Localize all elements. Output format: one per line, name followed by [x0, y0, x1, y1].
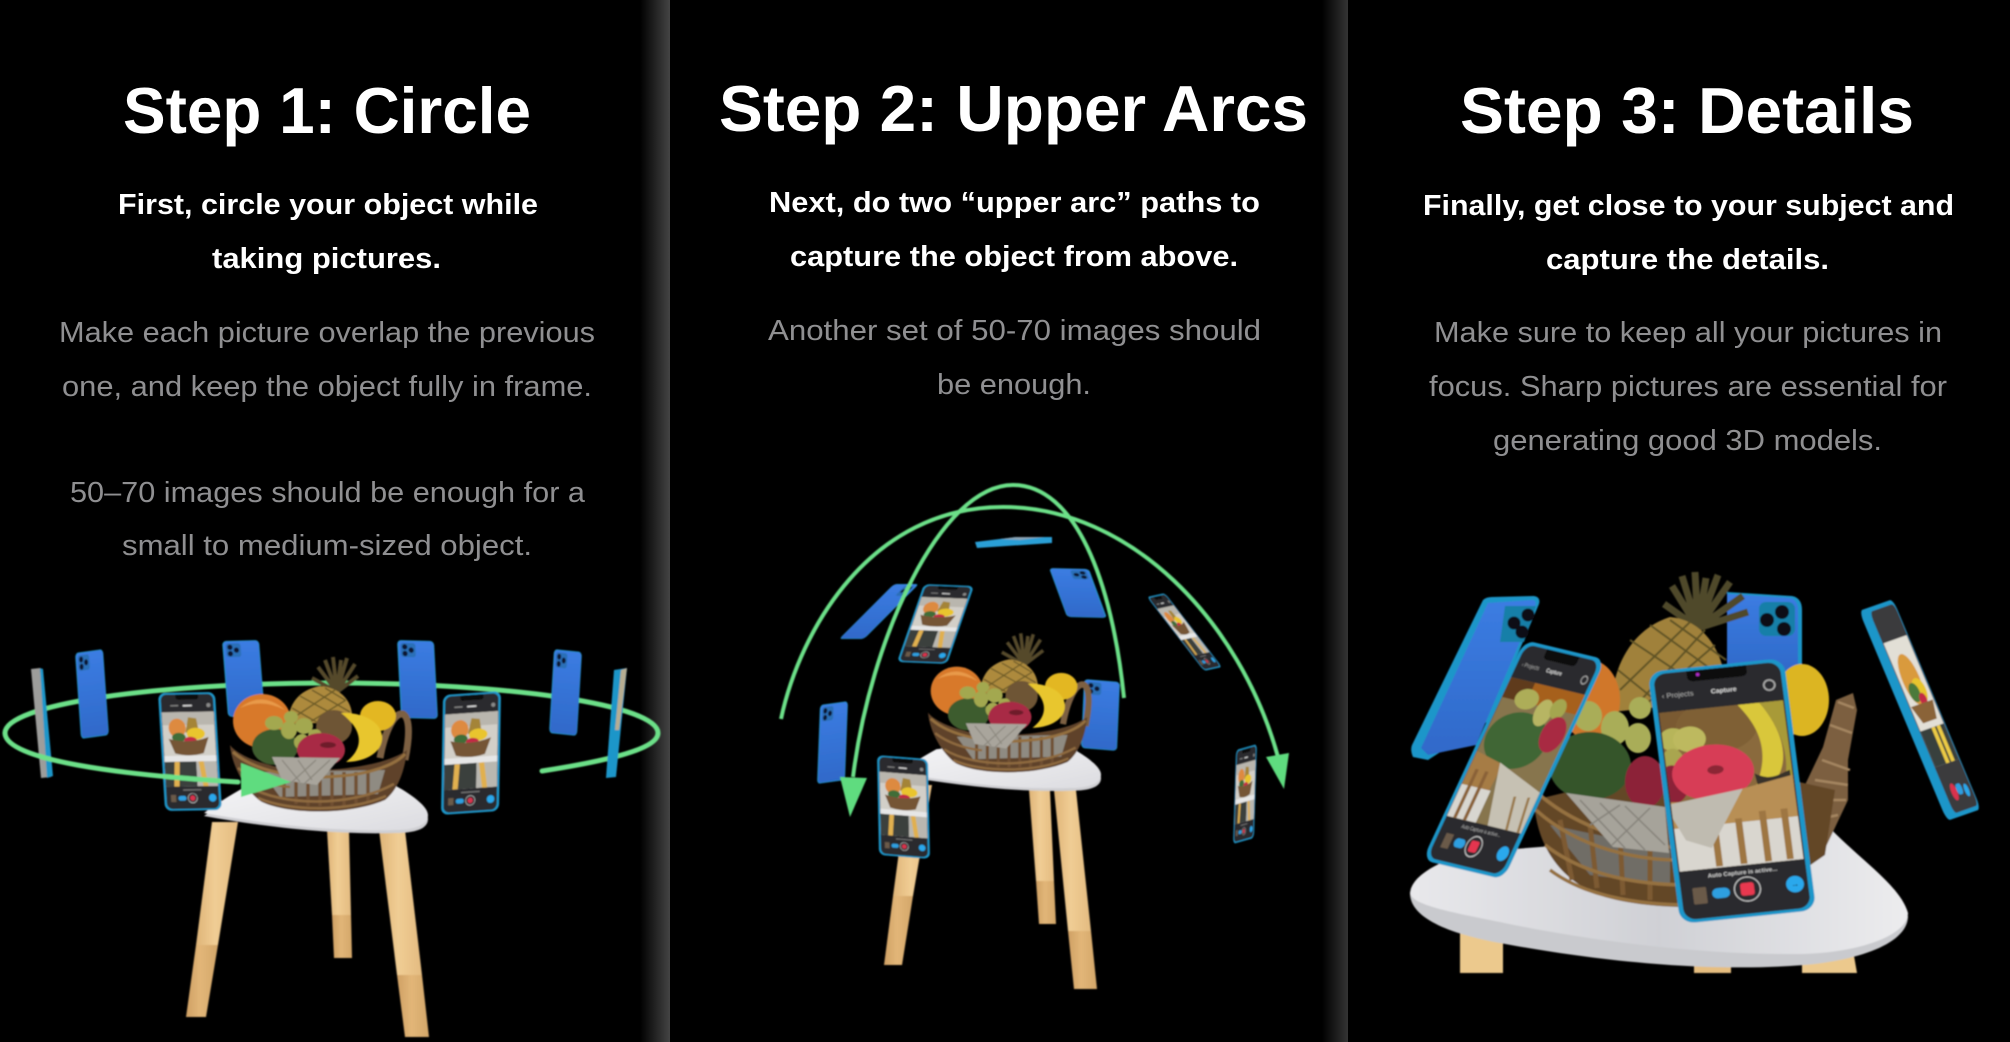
ring front with arrow — [5, 733, 291, 797]
divider: panel 2 to 3 — [1322, 0, 1348, 1042]
arc two with arrow — [840, 485, 1124, 817]
body text: step 3 — [1429, 317, 1947, 457]
lead text: step 2 — [769, 187, 1260, 273]
heading: step 1: Step 1: Circle — [123, 74, 531, 147]
close-up phone left — [1422, 640, 1606, 880]
body text: step 2 — [768, 315, 1261, 401]
lead text: step 1: First, circle your object while — [118, 189, 538, 221]
illustration: circular capture path around fruit basket — [5, 640, 658, 1037]
body text: step 3: generating good 3D models. — [1493, 425, 1882, 457]
lead text: step 1: taking pictures. — [212, 243, 441, 275]
edge-on phones — [31, 668, 627, 778]
body text: step 1: one, and keep the object fully in frame. — [62, 371, 592, 403]
avocado — [1549, 732, 1631, 800]
close-up phone left: Capture — [1545, 668, 1563, 678]
table top — [1410, 825, 1908, 967]
phones showing backs — [817, 568, 1120, 784]
close-up phone center: Capture — [1711, 686, 1737, 695]
body text: step 2: Another set of 50-70 images should — [768, 315, 1261, 347]
lead text: step 2: Next, do two “upper arc” paths to — [769, 187, 1260, 219]
heading: step 2: Step 2: Upper Arcs — [719, 72, 1308, 145]
table top — [899, 743, 1101, 791]
panel: step 2 upper arcs — [719, 72, 1308, 989]
lemon — [1775, 664, 1829, 736]
grapes — [1574, 697, 1651, 753]
lead text: step 2: capture the object from above. — [790, 241, 1238, 273]
table legs — [186, 822, 429, 1037]
back phone right — [1727, 592, 1802, 672]
divider: panel 1 to 2 — [640, 0, 670, 1042]
lead text: step 1 — [118, 189, 538, 275]
fruit basket close-up — [1534, 572, 1857, 907]
phone seen from edge at top — [975, 537, 1052, 548]
phones showing screens — [897, 584, 1257, 844]
phone far right — [1859, 599, 1981, 821]
body text: step 1: Make each picture overlap the previous — [59, 317, 595, 349]
close-up phone left: ‹ Projects — [1520, 662, 1541, 672]
body text: step 1: 50–70 images should be enough for a — [70, 477, 586, 509]
illustration: upper arc capture paths — [781, 485, 1289, 989]
close-up phone center: → — [1790, 880, 1800, 889]
close-up phone center — [1644, 658, 1816, 924]
phones behind the ring — [75, 640, 582, 739]
fruit basket — [230, 657, 409, 812]
phone in front of the table — [877, 755, 930, 859]
fruit basket — [928, 633, 1089, 772]
bowl — [1534, 760, 1835, 907]
lead text: step 3: Finally, get close to your subject and — [1423, 190, 1954, 222]
table top — [204, 780, 428, 833]
orange — [1560, 660, 1620, 740]
apple — [1625, 756, 1665, 808]
body text: step 2: be enough. — [937, 369, 1091, 401]
panel: step 1 circle — [5, 74, 658, 1037]
table legs — [1460, 930, 1857, 973]
arc one with arrow — [781, 507, 1289, 789]
cloth — [1566, 793, 1669, 853]
back phone left — [1411, 596, 1539, 760]
body text: step 3: focus. Sharp pictures are essential for — [1429, 371, 1947, 403]
handle — [1804, 693, 1857, 853]
body text: step 1: small to medium-sized object. — [122, 530, 532, 562]
lead text: step 3 — [1423, 190, 1954, 276]
phones in front — [158, 691, 501, 815]
pineapple — [1612, 617, 1726, 712]
ring path — [5, 683, 658, 771]
table legs — [884, 785, 1097, 989]
pineapple crown — [1664, 572, 1748, 628]
heading: step 3: Step 3: Details — [1460, 74, 1914, 147]
close-up phone center: Auto Capture is active... — [1708, 867, 1778, 880]
illustration: close-up detail capture — [1410, 572, 1981, 973]
panel: step 3 details — [1410, 74, 1981, 973]
close-up phone center: ‹ Projects — [1661, 689, 1694, 701]
lead text: step 3: capture the details. — [1546, 244, 1829, 276]
close-up phone left: Auto Capture is active... — [1461, 823, 1502, 838]
body text: step 1 — [59, 317, 595, 562]
body text: step 3: Make sure to keep all your pictures in — [1434, 317, 1942, 349]
